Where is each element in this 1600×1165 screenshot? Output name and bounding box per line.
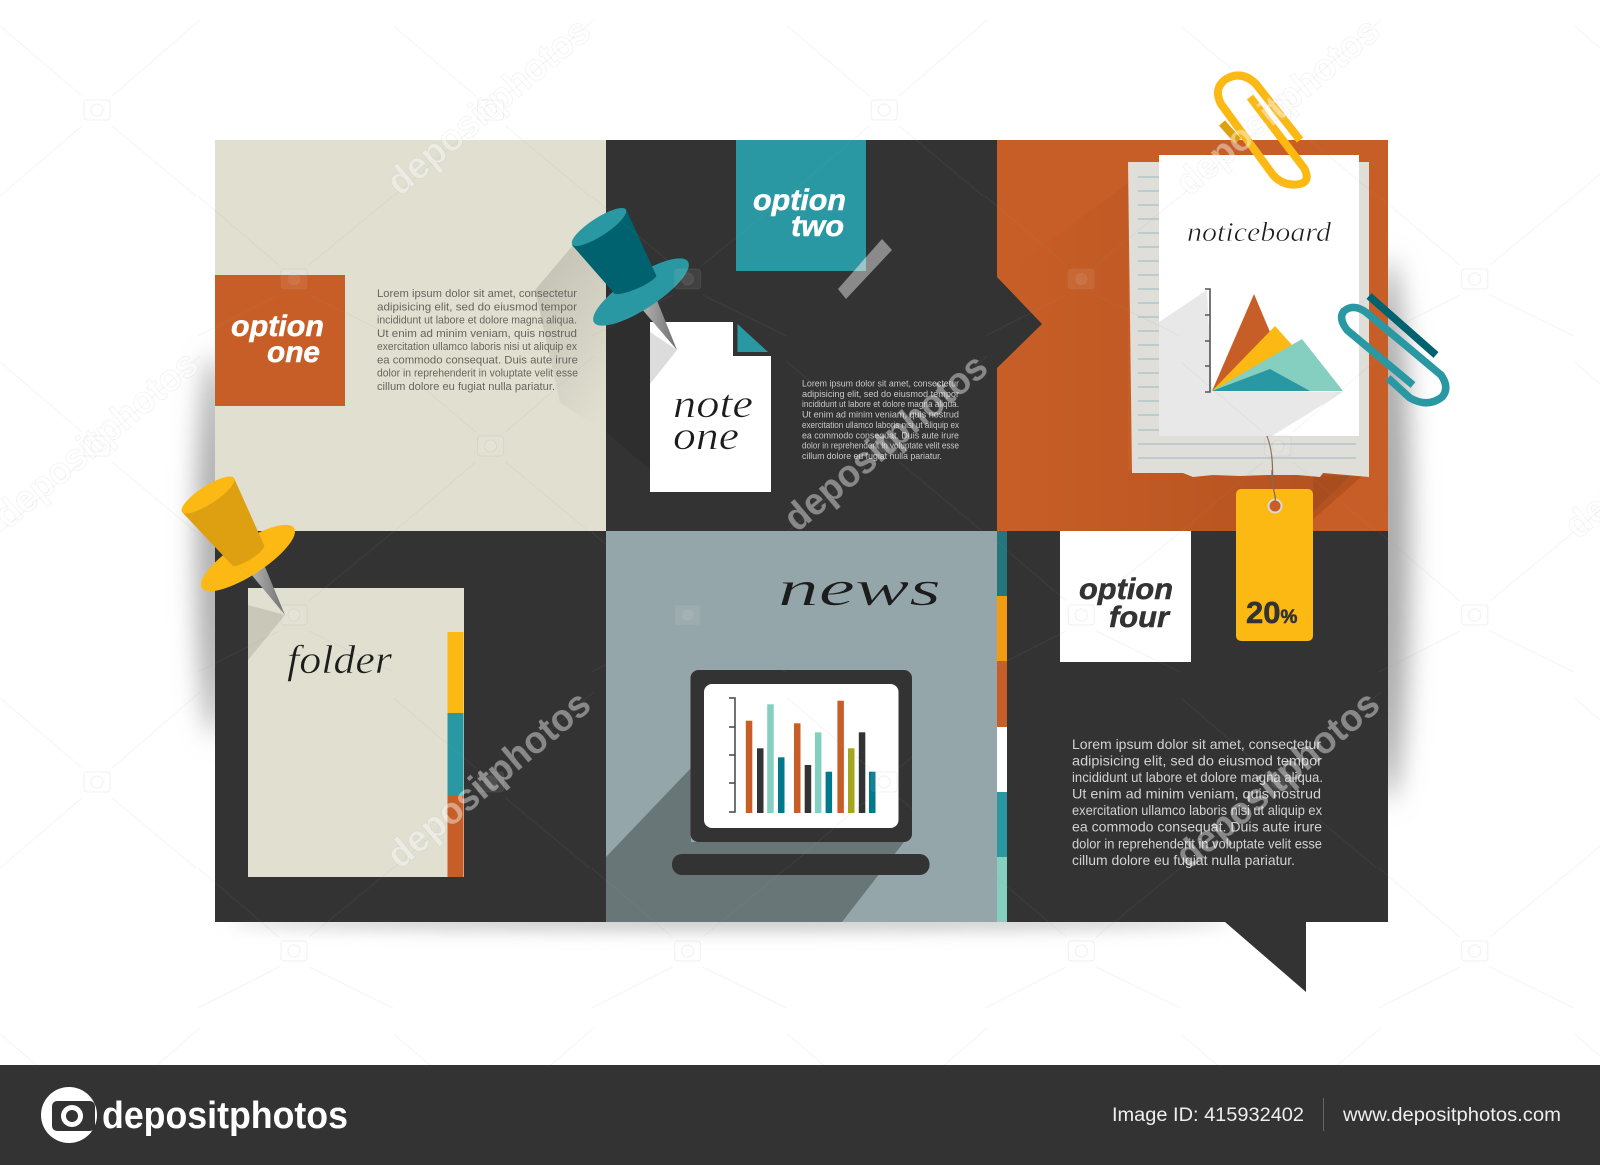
option two body text: ea commodo consequat. Duis aute irure: [802, 430, 959, 440]
bar chart: [729, 698, 876, 813]
option one label box: [215, 275, 345, 406]
option two heading: two: [791, 210, 844, 243]
watermark text: depositphotos: [379, 10, 599, 204]
watermark text: depositphotos: [776, 346, 996, 540]
option two label box: [736, 140, 866, 271]
panel: news: [606, 531, 997, 922]
panel: folder: [215, 531, 606, 922]
back lined paper: [1128, 162, 1369, 477]
option two body text: dolor in reprehenderit in voluptate velit esse: [802, 441, 959, 451]
option one body text: ea commodo consequat. Duis aute irure: [377, 354, 578, 366]
folder pin shadow: [248, 605, 285, 660]
option one body text: dolor in reprehenderit in voluptate velit esse: [377, 368, 578, 380]
option one body text: [377, 288, 578, 393]
note shadow: [650, 332, 677, 384]
option two body text: exercitation ullamco laboris nisi ut aliquip ex: [802, 420, 960, 430]
option one body text: Ut enim ad minim veniam, quis nostrud: [377, 328, 577, 340]
laptop long shadow: [606, 768, 904, 922]
tape: [838, 239, 892, 299]
watermark text: depositphotos: [379, 683, 599, 877]
logo icon: [41, 1087, 97, 1143]
option four body text: incididunt ut labore et dolore magna aliqua.: [1072, 769, 1323, 785]
note handwriting: note: [673, 381, 753, 426]
option one body text: exercitation ullamco laboris nisi ut aliquip ex: [377, 341, 577, 353]
option one heading: option: [231, 310, 324, 343]
option one body text: incididunt ut labore et dolore magna aliqua.: [377, 314, 577, 326]
option two body text: Ut enim ad minim veniam, quis nostrud: [802, 410, 959, 420]
folder tabs: [448, 632, 464, 877]
watermark text: depositphotos: [1168, 10, 1388, 204]
option one body text: cillum dolore eu fugiat nulla pariatur.: [377, 381, 555, 393]
option four body text: ea commodo consequat. Duis aute irure: [1072, 819, 1322, 835]
option four heading: option: [1079, 573, 1173, 606]
watermark text: depositphotos: [1168, 683, 1388, 877]
option four body text: [1072, 736, 1323, 868]
note handwriting: [673, 381, 753, 458]
area chart: [1205, 289, 1343, 392]
option one heading: one: [267, 336, 320, 369]
soft panel shadows: [197, 260, 1410, 931]
pin shadow on dark panel: [606, 280, 677, 470]
panel: option one: [215, 140, 606, 531]
option two body text: Lorem ipsum dolor sit amet, consectetur: [802, 378, 959, 388]
long shadow of paper: [1005, 183, 1369, 531]
option one body text: Lorem ipsum dolor sit amet, consectetur: [377, 288, 577, 300]
watermark text: [0, 10, 1600, 877]
discount value: 20%: [1246, 595, 1297, 630]
colour stripe: [997, 531, 1007, 922]
option two body text: [802, 378, 960, 461]
logo wordmark: depositphotos: [102, 1095, 348, 1137]
icon: teal push pin: [567, 202, 697, 350]
panel: option four speech bubble: [1007, 531, 1388, 992]
news handwriting: news: [778, 560, 941, 616]
icon: yellow push pin: [177, 471, 303, 615]
folder sheet: [248, 588, 464, 877]
option four body text: cillum dolore eu fugiat nulla pariatur.: [1072, 852, 1295, 868]
note paper: [650, 322, 771, 492]
panel: option two: [606, 140, 997, 531]
option four heading: four: [1109, 601, 1171, 634]
option four body text: adipisicing elit, sed do eiusmod tempor: [1072, 752, 1322, 768]
folder handwriting: folder: [287, 637, 392, 682]
option four heading: [1079, 573, 1173, 634]
icon: teal paper clip: [1342, 296, 1446, 403]
note handwriting: one: [673, 413, 739, 458]
website: www.depositphotos.com: [1342, 1105, 1561, 1126]
option two body text: cillum dolore eu fugiat nulla pariatur.: [802, 451, 942, 461]
tag shadow: [1313, 476, 1350, 512]
note folded corner: [738, 324, 768, 352]
panel: noticeboard: [997, 140, 1388, 531]
option two heading: [753, 184, 846, 243]
option two body text: incididunt ut labore et dolore magna aliqua.: [802, 399, 959, 409]
option two body text: adipisicing elit, sed do eiusmod tempor: [802, 389, 959, 399]
noticeboard handwriting: noticeboard: [1187, 217, 1332, 247]
option four body text: dolor in reprehenderit in voluptate velit esse: [1072, 835, 1322, 851]
footer bar: [0, 1065, 1600, 1165]
arrow notch: [997, 277, 1042, 368]
option two heading: option: [753, 184, 846, 217]
option four body text: Lorem ipsum dolor sit amet, consectetur: [1072, 736, 1321, 752]
laptop: [672, 670, 930, 875]
front white paper: [1159, 155, 1359, 436]
option one heading: [231, 310, 324, 369]
option four body text: Ut enim ad minim veniam, quis nostrud: [1072, 786, 1321, 802]
image id: Image ID: 415932402: [1112, 1105, 1304, 1126]
option one body text: adipisicing elit, sed do eiusmod tempor: [377, 301, 577, 313]
price tag string: [1267, 436, 1275, 506]
icon: yellow paper clip: [1218, 75, 1307, 185]
price tag: [1236, 470, 1313, 641]
option four body text: exercitation ullamco laboris nisi ut aliquip ex: [1072, 802, 1322, 818]
pin shadow on beige panel: [535, 244, 606, 432]
option four label box: [1060, 531, 1191, 662]
